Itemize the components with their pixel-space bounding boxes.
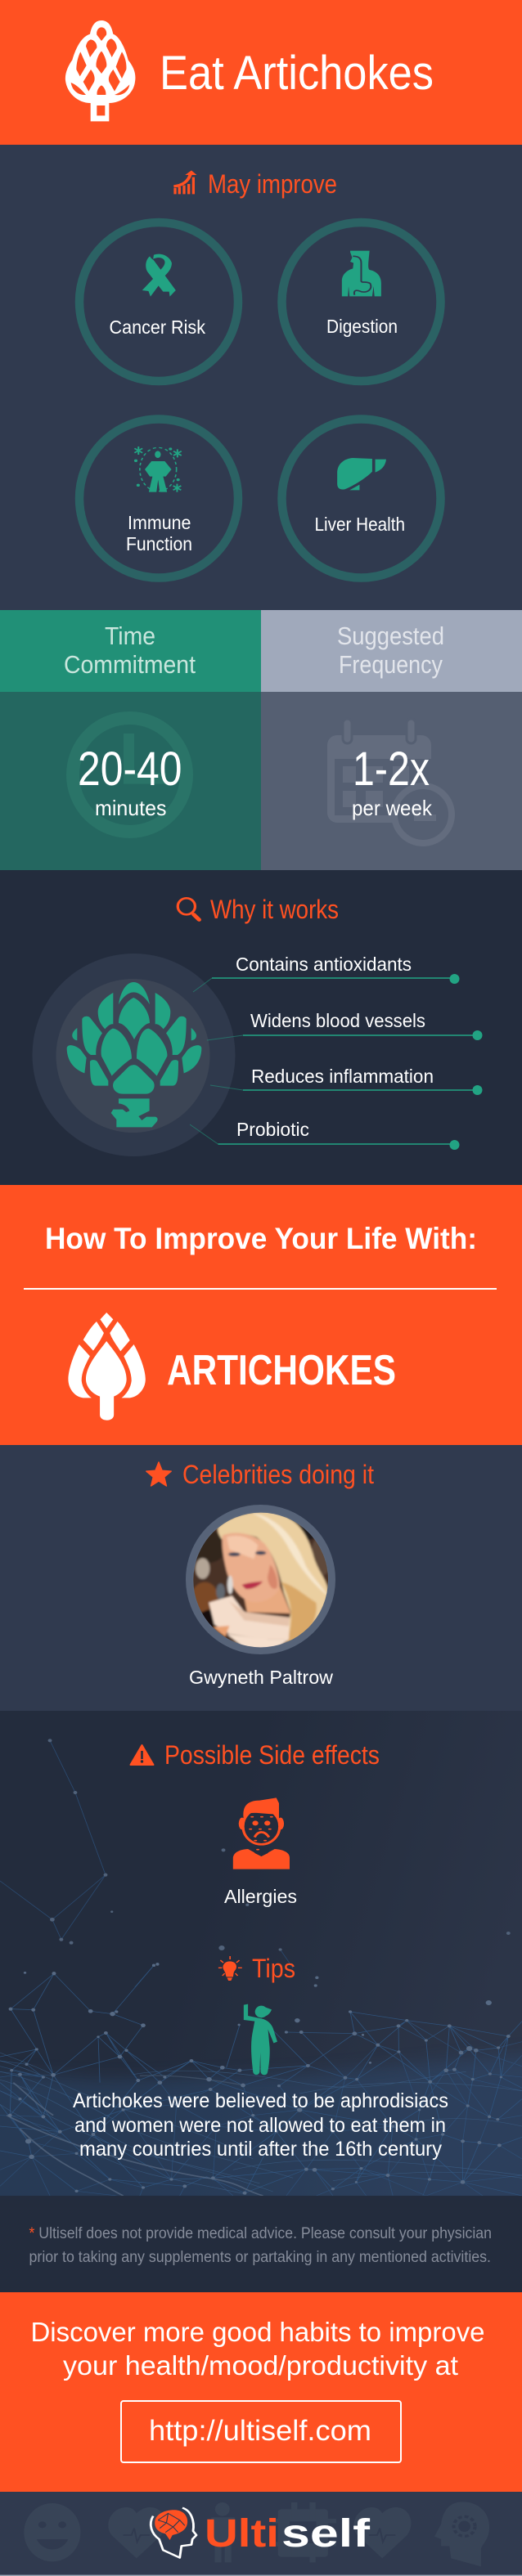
value: 20-40 minutes <box>78 743 182 820</box>
label: suggested frequency: Frequency <box>339 650 443 679</box>
heading: possible side effects: Possible Side effects <box>164 1740 380 1770</box>
panel: may improve <box>0 145 522 610</box>
value: 1-2x per week <box>352 743 433 820</box>
icon: woman raising hand <box>244 2004 277 2075</box>
tip text: Artichokes were believed to be aphrodisiacs <box>73 2089 448 2112</box>
panel: time commitment <box>0 610 261 870</box>
logo: ultiself: Ulti <box>205 2512 279 2556</box>
label: time commitment <box>64 622 196 679</box>
panel: celebrities <box>0 1445 522 1711</box>
callout: reduces inflammation <box>210 1066 483 1095</box>
background: faint icons <box>24 2502 489 2566</box>
heading: celebrities doing it: Celebrities doing it <box>182 1460 374 1489</box>
value: 20-40 minutes: 20-40 <box>78 743 182 796</box>
heading: may improve: May improve <box>208 169 337 199</box>
icon: warning triangle <box>131 1745 154 1765</box>
label: time commitment: Commitment <box>64 650 196 679</box>
value: 1-2x per week: per week <box>352 796 433 820</box>
icon: allergic man <box>233 1797 290 1869</box>
panel: side effects and tips <box>0 1711 522 2292</box>
benefit: digestion: Digestion <box>326 316 398 337</box>
icon: calendar watermark <box>327 719 452 843</box>
benefit: immune function: Function <box>126 533 192 554</box>
value: 20-40 minutes: minutes <box>95 796 167 820</box>
cta text: Discover more good habits to improve <box>31 2317 484 2347</box>
panel: footer <box>0 2492 522 2576</box>
benefit: cancer risk <box>79 222 238 381</box>
panel: call to action <box>0 2292 522 2492</box>
logo: ultiself <box>151 2508 371 2558</box>
url button: http://ultiself.com <box>149 2415 371 2447</box>
cta text <box>31 2317 484 2381</box>
panel: header <box>0 0 522 145</box>
heading: tips: Tips <box>252 1954 295 1983</box>
icon: outlined artichoke <box>65 20 135 121</box>
panel: why it works <box>0 870 522 1185</box>
label: allergies: Allergies <box>224 1886 297 1907</box>
icon: green artichoke <box>67 982 201 1127</box>
callout: widens blood vessels <box>207 1010 483 1040</box>
cta text: your health/mood/productivity at <box>63 2350 458 2381</box>
label: suggested frequency: Suggested <box>337 622 444 650</box>
icon: magnifier <box>178 898 199 920</box>
panel: how to improve <box>0 1185 522 1445</box>
callout: probiotic <box>190 1119 460 1150</box>
icon: white artichoke <box>68 1313 146 1420</box>
tip text: many countries until after the 16th century <box>79 2138 442 2161</box>
icon: clock watermark <box>73 718 187 832</box>
benefit: liver health: Liver Health <box>314 514 405 535</box>
background: network mesh <box>0 1963 522 2196</box>
benefit: liver health <box>281 419 440 577</box>
icon: light bulb <box>218 1956 242 1981</box>
benefit: digestion <box>281 222 440 381</box>
portrait <box>186 1505 335 1654</box>
url button <box>121 2401 401 2462</box>
disclaimer <box>29 2225 492 2266</box>
background: sparse constellation <box>0 1739 511 1987</box>
label: time commitment: Time <box>105 622 155 650</box>
benefit: cancer risk: Cancer Risk <box>110 316 205 338</box>
icon: rising chart <box>173 170 196 194</box>
benefit: immune function <box>79 419 238 577</box>
name: artichokes: ARTICHOKES <box>167 1347 396 1394</box>
callout: contains antioxidants <box>193 954 460 992</box>
benefit: immune function: Immune <box>128 512 191 533</box>
concentric circles <box>33 954 236 1156</box>
disclaimer: * Ultiself does not provide medical advice. Please consult your physician <box>29 2225 492 2242</box>
callout: probiotic: Probiotic <box>236 1119 309 1140</box>
callout: contains antioxidants: Contains antioxidants <box>236 954 412 975</box>
value: 1-2x per week: 1-2x <box>353 743 430 796</box>
callout: reduces inflammation: Reduces inflammation <box>251 1066 434 1087</box>
tip text <box>73 2089 448 2161</box>
label: suggested frequency <box>337 622 444 679</box>
panel: suggested frequency <box>261 610 522 870</box>
caption: gwyneth paltrow: Gwyneth Paltrow <box>189 1667 333 1688</box>
icon: star <box>146 1462 171 1486</box>
heading: why it works: Why it works <box>210 895 339 924</box>
logo: ultiself: self <box>281 2512 371 2556</box>
disclaimer: prior to taking any supplements or partaking in any mentioned activities. <box>29 2249 491 2266</box>
title: Eat Artichokes <box>160 47 434 100</box>
callout: widens blood vessels: Widens blood vessels <box>250 1010 425 1031</box>
heading: how to improve: How To Improve Your Life With: <box>45 1222 477 1255</box>
tip text: and women were not allowed to eat them in <box>74 2114 446 2137</box>
